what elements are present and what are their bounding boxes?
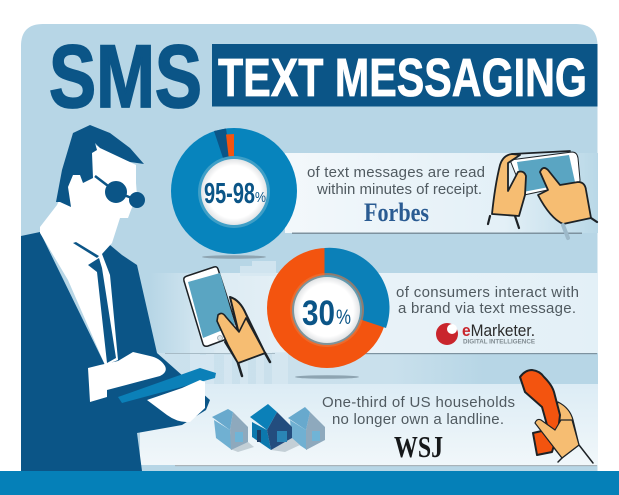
logo: WSJ: WSJ: [394, 429, 443, 464]
house left: [212, 409, 254, 452]
text block: wsj stat: [322, 394, 515, 428]
sunglasses: [95, 176, 144, 208]
bottom bar: [0, 471, 619, 495]
donut: 30%: [267, 248, 390, 379]
jacket: [21, 232, 210, 471]
house right: [288, 407, 325, 450]
row divider lines: [165, 232, 597, 466]
faint city backdrop band: [140, 353, 598, 384]
upper hand: [88, 352, 166, 402]
donut: 95-98%: %: [255, 189, 266, 206]
text block: wsj stat: One-third of US households: [322, 394, 515, 411]
icon: hands holding landscape phone: [488, 151, 597, 238]
title band: [212, 44, 598, 108]
faint city buildings: [190, 261, 288, 384]
tie: [88, 258, 116, 363]
logo: eMarketer: eMarketer.: [462, 321, 535, 340]
text block: forbes stat: of text messages are read: [307, 164, 485, 181]
collar crease: [73, 242, 99, 258]
row panel: wsj: [140, 384, 598, 465]
hair: [56, 125, 144, 207]
logo: eMarketer: DIGITAL INTELLIGENCE: [463, 338, 535, 346]
row panel: forbes: [285, 153, 598, 233]
value: 30: [302, 294, 335, 333]
row panel: emarketer: [150, 273, 598, 353]
value: 95-98: [204, 178, 255, 210]
logo: eMarketer: [436, 321, 535, 346]
tablet: [118, 368, 216, 403]
shirt and face: [40, 145, 137, 365]
icon: hand holding portrait phone: [184, 267, 270, 376]
text block: wsj stat: no longer own a landline.: [332, 411, 504, 428]
text block: emarketer stat: of consumers interact with: [396, 284, 579, 301]
icon: houses: [212, 404, 325, 452]
donut: 30%: %: [336, 306, 351, 329]
house center: [250, 404, 300, 452]
text block: emarketer stat: [396, 284, 579, 317]
lower hand: [147, 380, 205, 422]
donut: 95-98%: [171, 128, 297, 259]
title: SMS: SMS: [49, 26, 202, 126]
icon: hand holding telephone receiver: [520, 370, 593, 463]
man silhouette: [21, 125, 216, 471]
logo: Forbes: Forbes: [364, 198, 429, 227]
text block: forbes stat: [307, 164, 485, 227]
text block: emarketer stat: a brand via text message.: [398, 300, 576, 317]
text block: forbes stat: within minutes of receipt.: [316, 181, 482, 198]
